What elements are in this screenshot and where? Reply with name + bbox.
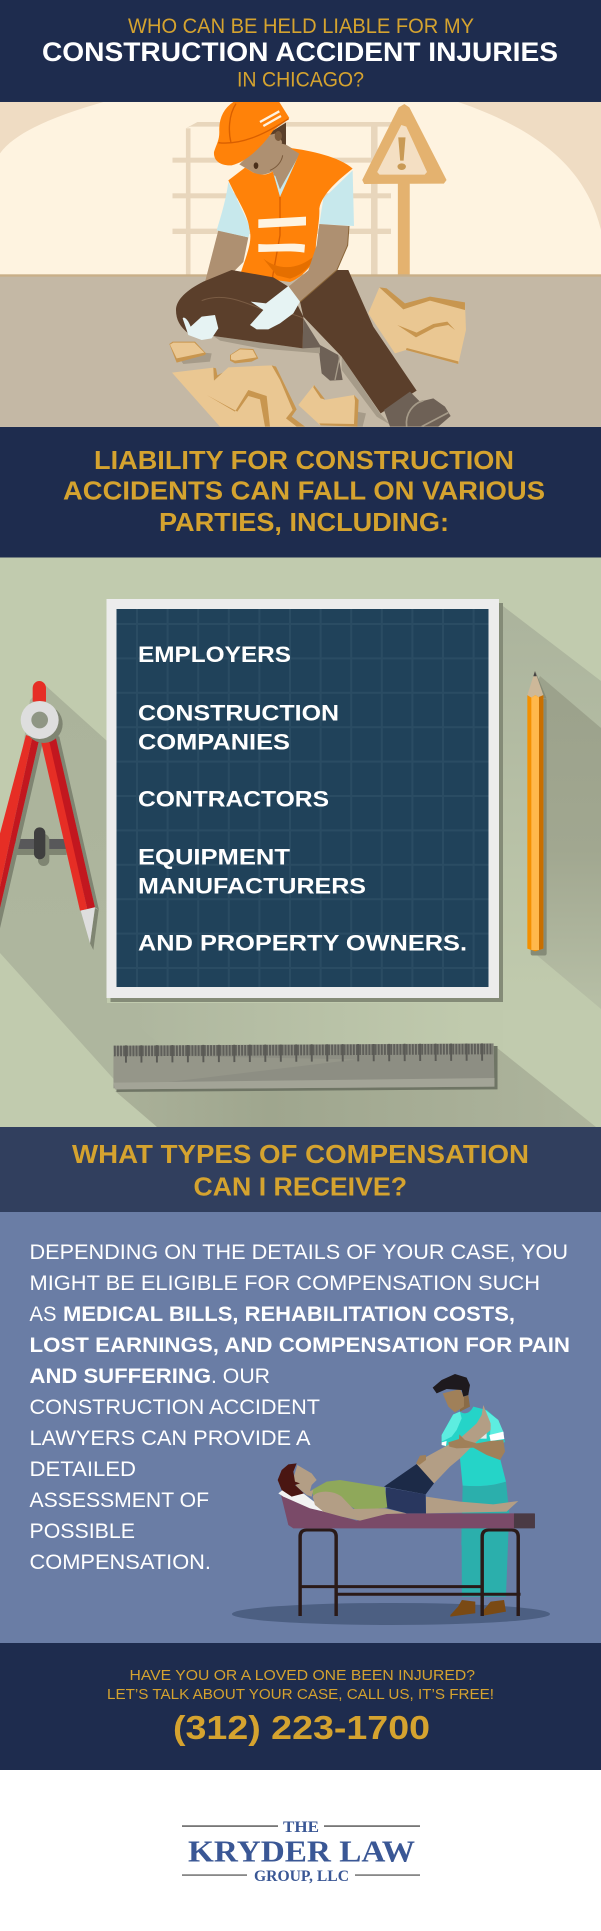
subtitle banner: compensation (0, 1127, 601, 1212)
title banner: CONSTRUCTION ACCIDENT INJURIES (42, 37, 558, 67)
call to action banner: HAVE YOU OR A LOVED ONE BEEN INJURED? (130, 1667, 475, 1684)
text block: compensation explanation: MEDICAL BILLS, REHABILITATION COSTS, (63, 1303, 515, 1326)
list of liable parties: CONSTRUCTION (138, 700, 339, 726)
title banner (0, 0, 601, 102)
icon: ruler (113, 1043, 498, 1092)
subtitle banner: liability (0, 427, 601, 558)
text block: compensation explanation: AS (30, 1303, 56, 1326)
text block: compensation explanation: COMPENSATION. (30, 1551, 211, 1574)
text block: compensation explanation: . OUR (211, 1365, 270, 1388)
list of liable parties: MANUFACTURERS (138, 874, 366, 898)
title banner: IN CHICAGO? (237, 68, 364, 92)
icon: rocks and rear leg (169, 270, 466, 427)
panel: compensation details (0, 1212, 601, 1643)
worker right arm (288, 224, 349, 302)
text block: compensation explanation: CONSTRUCTION ACCIDENT (30, 1396, 320, 1419)
logo: The Kryder Law Group, LLC (182, 1819, 420, 1885)
logo: The Kryder Law Group, LLC: THE (283, 1819, 319, 1836)
icon: warning sign (362, 104, 447, 276)
blueprint board (106, 599, 503, 1002)
icon: pencil (527, 671, 547, 955)
subtitle banner: liability: LIABILITY FOR CONSTRUCTION (94, 445, 514, 475)
subtitle banner: compensation: WHAT TYPES OF COMPENSATION (72, 1139, 529, 1169)
text block: compensation explanation: LOST EARNINGS, AND COMPENSATION FOR PAIN (30, 1334, 570, 1357)
illustration: physical therapy session (232, 1374, 550, 1625)
call to action banner (0, 1643, 601, 1770)
logo: The Kryder Law Group, LLC: GROUP, LLC (254, 1868, 349, 1885)
list of liable parties: COMPANIES (138, 730, 290, 754)
icon: hard hat (214, 102, 289, 165)
text block: compensation explanation: DEPENDING ON THE DETAILS OF YOUR CASE, YOU (30, 1241, 568, 1264)
text block: compensation explanation: MIGHT BE ELIGIBLE FOR COMPENSATION SUCH (30, 1272, 540, 1295)
subtitle banner: compensation: CAN I RECEIVE? (194, 1172, 407, 1202)
subtitle banner: liability: ACCIDENTS CAN FALL ON VARIOUS (63, 476, 545, 506)
list of liable parties: EMPLOYERS (138, 642, 291, 667)
list of liable parties: CONTRACTORS (138, 786, 329, 812)
list of liable parties: AND PROPERTY OWNERS. (138, 930, 467, 956)
text block: compensation explanation (30, 1241, 570, 1574)
list of liable parties (138, 642, 467, 956)
title banner: WHO CAN BE HELD LIABLE FOR MY (128, 15, 474, 38)
icon: drafting compass (0, 681, 99, 950)
text block: compensation explanation: DETAILED (30, 1458, 136, 1481)
logo: The Kryder Law Group, LLC: KRYDER LAW (188, 1834, 415, 1868)
text block: compensation explanation: LAWYERS CAN PROVIDE A (30, 1427, 311, 1450)
panel: drafting desk (0, 558, 601, 1127)
text block: compensation explanation: ASSESSMENT OF (30, 1489, 209, 1512)
worker torso, vest and head (205, 102, 354, 282)
list of liable parties: EQUIPMENT (138, 844, 291, 870)
illustration: injured construction worker (0, 102, 601, 427)
icon: gloves (183, 286, 300, 340)
subtitle banner: liability: PARTIES, INCLUDING: (159, 507, 449, 537)
text block: compensation explanation: AND SUFFERING (30, 1365, 211, 1388)
phone number: (312) 223-1700 (173, 1709, 430, 1746)
worker bent leg (176, 270, 320, 353)
call to action banner: LET’S TALK ABOUT YOUR CASE, CALL US, IT’S FREE! (107, 1686, 494, 1703)
text block: compensation explanation: POSSIBLE (30, 1520, 135, 1543)
